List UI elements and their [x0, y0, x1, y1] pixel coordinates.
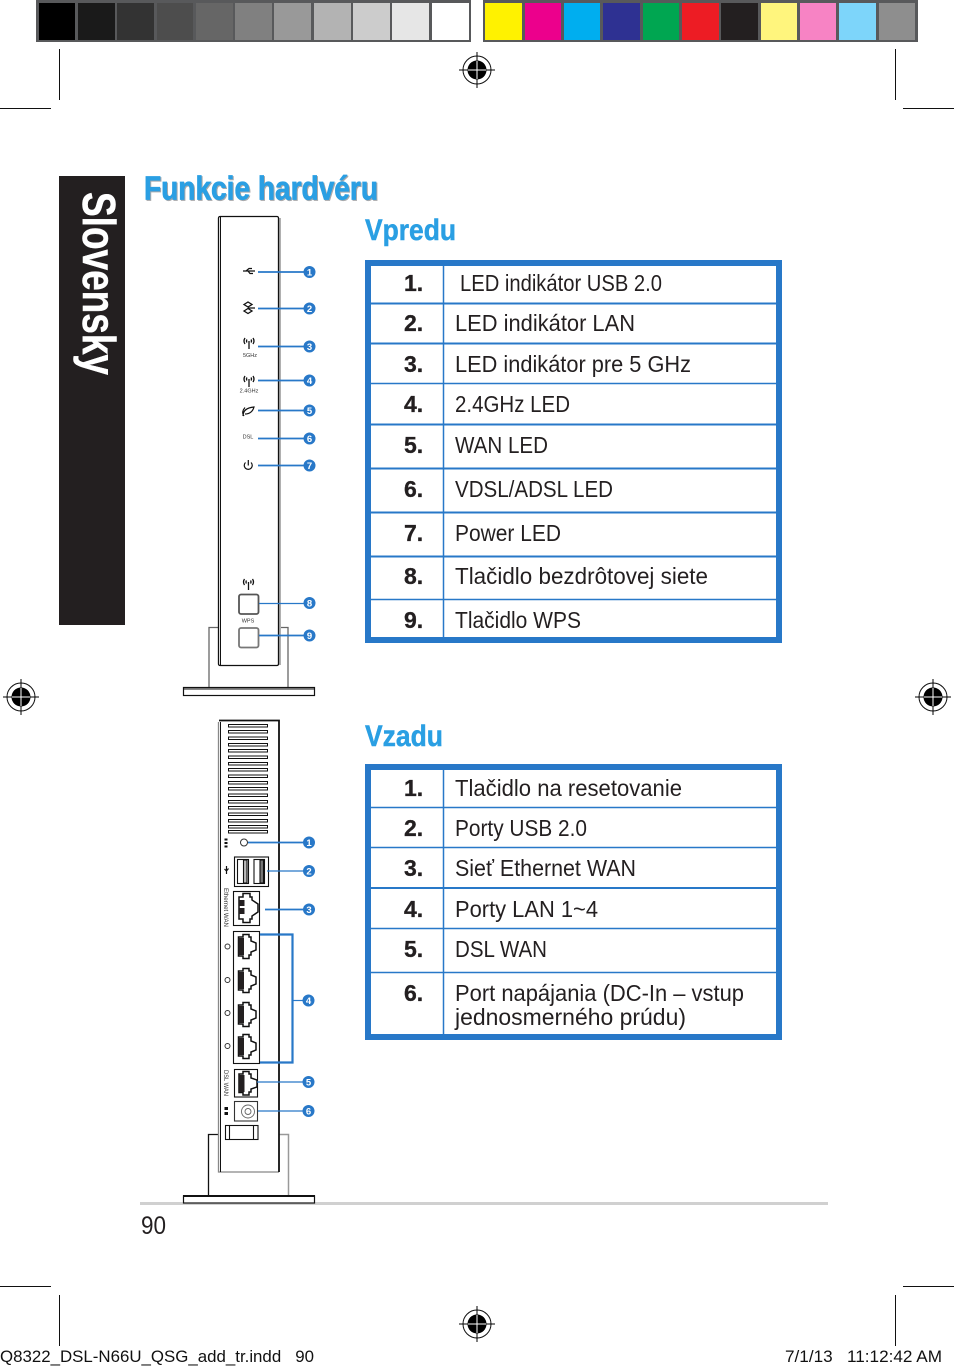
- row 7: Power LED: [455, 520, 561, 546]
- callout 1: [258, 266, 316, 278]
- label: DSL: DSL: [243, 434, 253, 440]
- registration mark: top: [459, 52, 495, 88]
- LAN port 3: [238, 1002, 256, 1026]
- row 1: Tlačidlo na resetovanie: [455, 775, 682, 801]
- row 9: 9.: [404, 607, 423, 633]
- icon: reset dots: [224, 838, 228, 848]
- callout 6: [258, 432, 316, 445]
- callout 4: [258, 374, 316, 387]
- port: DC power: [234, 1102, 258, 1121]
- row 5: WAN LED: [455, 432, 548, 458]
- callout 6: [258, 1105, 314, 1117]
- callout 3: [258, 340, 316, 353]
- router body: [218, 216, 281, 666]
- power switch: [226, 1126, 258, 1140]
- LAN port 4: [238, 1034, 256, 1058]
- row 2: [404, 815, 587, 841]
- row 4: Porty LAN 1~4: [455, 896, 598, 922]
- language tab: Slovensky: Slovensky: [73, 192, 125, 375]
- row 2: LED indikátor LAN: [455, 310, 635, 336]
- row 2: 2.: [404, 815, 423, 841]
- USB ports: [234, 857, 268, 886]
- row 7: [404, 520, 561, 546]
- row 4: [404, 391, 570, 417]
- row 3: Sieť Ethernet WAN: [455, 855, 636, 881]
- row 6: Port napájania (DC-In – vstup: [455, 980, 744, 1006]
- row 5: DSL WAN: [455, 936, 547, 962]
- label: Ethernet WAN: Ethernet WAN: [222, 888, 229, 927]
- LAN port 1: [238, 934, 256, 958]
- row 6: 6.: [404, 476, 423, 502]
- row 5: [404, 936, 547, 962]
- callout 7: 7: [307, 461, 312, 472]
- callout 5: [257, 1076, 314, 1088]
- icon: wireless button antenna: [244, 579, 254, 590]
- row 3: 3.: [404, 351, 423, 377]
- port: DSL WAN: [234, 1070, 258, 1097]
- table: front features: [368, 263, 779, 640]
- row 4: 2.4GHz LED: [455, 391, 570, 417]
- row 9: Tlačidlo WPS: [455, 607, 581, 633]
- row 6: jednosmerného prúdu): [454, 1004, 686, 1030]
- label: WPS: WPS: [242, 618, 255, 624]
- row 1: 1.: [404, 270, 423, 296]
- stand: [183, 1134, 315, 1203]
- icon: 5GHz antenna: [243, 338, 257, 359]
- row 2: Porty USB 2.0: [455, 815, 587, 841]
- registration mark: bottom: [459, 1306, 495, 1342]
- icon: power: [244, 460, 252, 469]
- callout 6: 6: [306, 1106, 311, 1117]
- row 8: 8.: [404, 563, 423, 589]
- icon: 2.4GHz antenna: [240, 376, 259, 394]
- language tab: Slovensky: [59, 176, 125, 625]
- grayscale colour bar: [36, 0, 471, 42]
- LAN number icons: [225, 944, 230, 1048]
- footer rule: [140, 1202, 828, 1205]
- icon: 5GHz antenna: 5GHz: [243, 353, 257, 359]
- row 3: LED indikátor pre 5 GHz: [455, 351, 691, 377]
- callout 3: 3: [307, 342, 312, 353]
- row 6: [404, 980, 744, 1030]
- table: rear features: [368, 767, 779, 1037]
- icon: power side: [224, 1107, 228, 1115]
- registration mark: right: [915, 679, 951, 715]
- callout 1: [248, 836, 315, 849]
- callout 5: 5: [306, 1077, 312, 1088]
- row 8: Tlačidlo bezdrôtovej siete: [455, 563, 708, 589]
- row 6: [404, 476, 613, 502]
- LAN ports group: [234, 932, 260, 1064]
- title: Funkcie hardvéru: [145, 170, 379, 208]
- page number: 90: [141, 1212, 166, 1240]
- callout 2: [267, 865, 315, 877]
- reset button: [240, 839, 248, 846]
- callout 2: 2: [307, 304, 312, 315]
- callout 3: 3: [306, 905, 312, 916]
- stand: [183, 628, 315, 696]
- process colour bar: [483, 0, 918, 42]
- icon: WAN globe: [243, 407, 254, 416]
- callout 4: 4: [307, 376, 313, 387]
- callout 1: 1: [307, 267, 313, 278]
- icon: 2.4GHz antenna: 2.4GHz: [240, 388, 259, 394]
- row 3: 3.: [404, 855, 423, 881]
- callout 1: 1: [306, 838, 312, 849]
- row 5: [404, 432, 548, 458]
- callout 2: [258, 302, 316, 315]
- callout 5: [258, 404, 316, 417]
- slug: file name: Q8322_DSL-N66U_QSG_add_tr.indd 90: [0, 1347, 314, 1366]
- callout 5: 5: [307, 406, 313, 417]
- button: WPS: [239, 628, 258, 648]
- callout 9: [259, 630, 316, 642]
- title: Funkcie hardvéru: [144, 170, 378, 206]
- row 1: LED indikátor USB 2.0: [460, 270, 662, 296]
- callout 4: [293, 994, 314, 1007]
- callout 8: [259, 597, 316, 609]
- row 5: 5.: [404, 432, 423, 458]
- heading: Vzadu: Vzadu: [365, 720, 443, 753]
- icon: USB side: [224, 866, 228, 874]
- diagram: router rear: [183, 720, 315, 1203]
- label: DSL WAN: DSL WAN: [222, 1070, 229, 1096]
- callout 7: [258, 460, 316, 472]
- callout 3: [265, 904, 315, 916]
- registration mark: left: [3, 679, 39, 715]
- button: wireless: [239, 594, 258, 614]
- row 4: 4.: [404, 391, 423, 417]
- row 2: 2.: [404, 310, 423, 336]
- row 6: VDSL/ADSL LED: [455, 476, 613, 502]
- row 7: 7.: [404, 520, 423, 546]
- diagram: router front: [183, 216, 316, 696]
- row 9: [404, 607, 581, 633]
- callout 2: 2: [306, 866, 312, 877]
- callout 4: 4: [306, 996, 312, 1007]
- slug: date and time: 7/1/13 11:12:42 AM: [785, 1347, 942, 1366]
- port: Ethernet WAN: [234, 892, 260, 926]
- row 4: 4.: [404, 896, 423, 922]
- icon: LAN: [244, 302, 255, 314]
- bracket: LAN ports: [260, 934, 292, 1062]
- router body: [218, 720, 279, 1172]
- heading: Vpredu: Vpredu: [365, 214, 456, 247]
- row 5: 5.: [404, 936, 423, 962]
- LAN port 2: [238, 968, 256, 992]
- row 1: 1.: [404, 775, 423, 801]
- row 6: 6.: [404, 980, 423, 1006]
- callout 6: 6: [307, 434, 312, 445]
- callout 9: 9: [307, 631, 312, 642]
- ventilation slots: [228, 724, 268, 833]
- callout 8: 8: [307, 598, 312, 609]
- icon: USB: [243, 268, 255, 274]
